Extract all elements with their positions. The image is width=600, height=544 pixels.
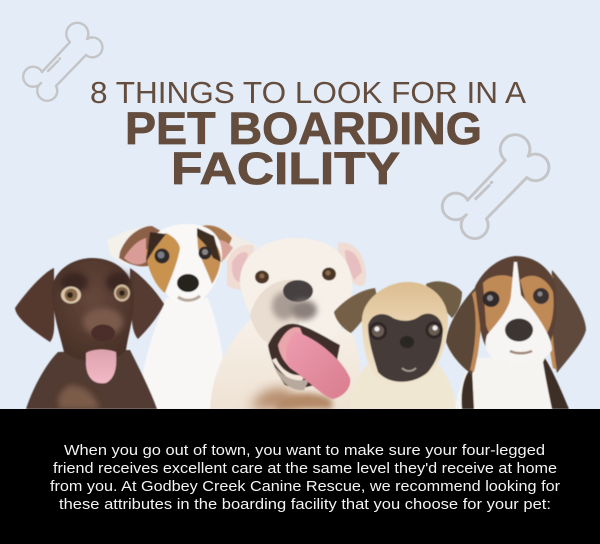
title line: pet boarding: PET BOARDING — [125, 103, 482, 154]
dog: chocolate labrador — [15, 258, 164, 409]
intro line 3: from you. At Godbey Creek Canine Rescue, we recommend looking for — [50, 478, 560, 495]
intro line 2: friend receives excellent care at the same level they'd receive at home — [53, 460, 557, 477]
title — [90, 76, 527, 194]
title line: 8 things: 8 THINGS TO LOOK FOR IN A — [90, 76, 527, 110]
icon: bone right — [442, 135, 549, 238]
dog: bulldog — [210, 238, 366, 409]
intro panel — [0, 409, 600, 544]
intro line 4: these attributes in the boarding facility that you choose for your pet: — [59, 496, 551, 513]
dog: pug — [334, 281, 462, 409]
intro text — [50, 442, 560, 513]
background panel — [0, 0, 600, 409]
icon: bone top left — [23, 23, 102, 101]
title line: facility: FACILITY — [171, 143, 400, 194]
intro line 1: When you go out of town, you want to make sure your four-legged — [64, 442, 545, 459]
dog group — [15, 224, 586, 409]
dog: jack russell — [107, 224, 259, 409]
dog: beagle — [446, 256, 586, 409]
dog: bulldog tongue — [286, 332, 350, 399]
